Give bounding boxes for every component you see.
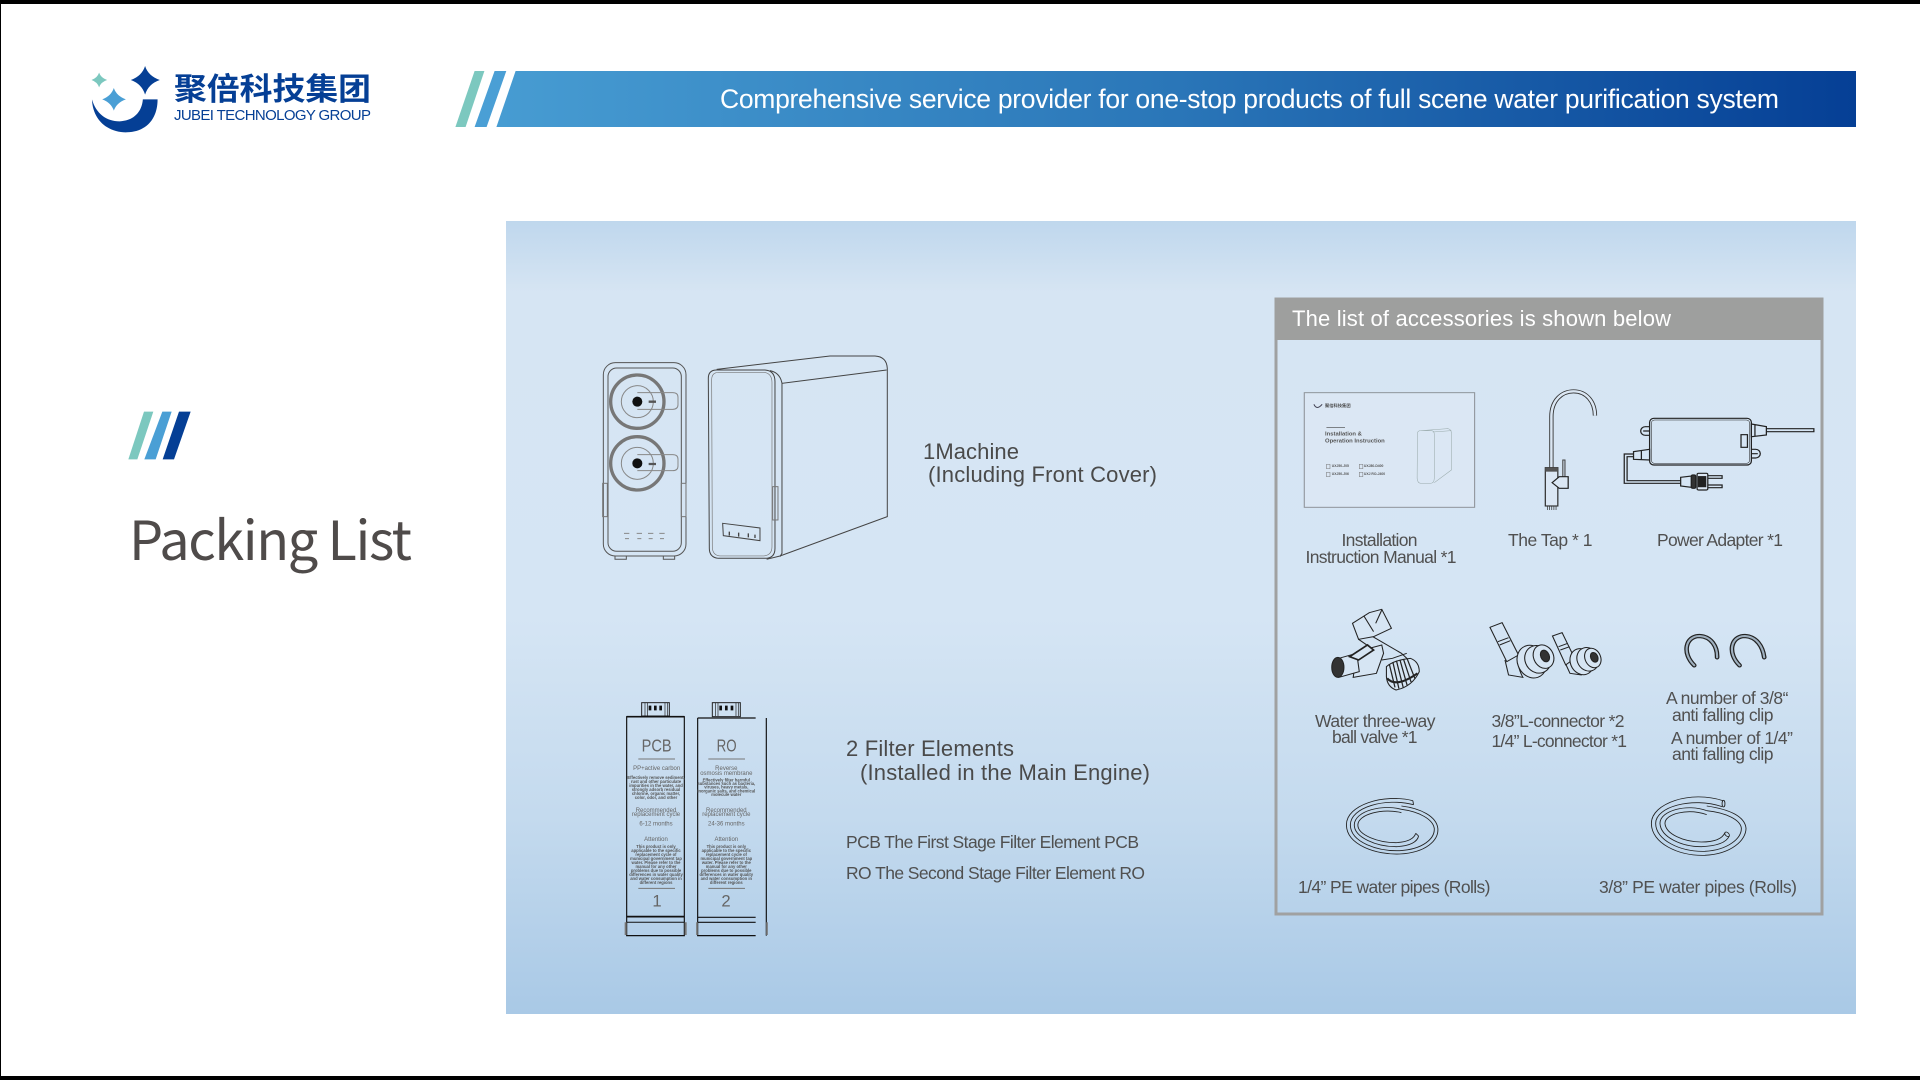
filter 2: RO: osmosis membrane xyxy=(700,771,753,777)
icon: stars and crescent xyxy=(92,66,160,132)
filter 1: PCB: PP+active carbon xyxy=(633,766,680,772)
filter 1: PCB: manual for any other xyxy=(635,864,677,869)
adapter label: Power Adapter *1 xyxy=(1657,530,1783,550)
filter 2: RO: replacement cycle of xyxy=(706,852,747,857)
filter 2: RO: water. Please refer to the xyxy=(701,860,751,865)
accessory: 1/4 inch PE pipe roll xyxy=(1298,798,1490,897)
clip label 1/4: A number of 1/4” xyxy=(1671,728,1793,748)
accessory: power adapter xyxy=(1624,418,1814,550)
filter 1: PCB: Recommended xyxy=(636,808,676,814)
filter 2: RO: Effectively filter harmful xyxy=(703,777,750,782)
heading stripes xyxy=(128,412,191,459)
heading text: Packing List xyxy=(129,497,412,576)
manual cover: 聚倍科技集团 xyxy=(1325,402,1351,408)
pipe roll label: 3/8” PE water pipes (Rolls) xyxy=(1599,877,1797,897)
accessory: 3/8 inch PE pipe roll xyxy=(1599,797,1797,897)
accessories frame xyxy=(1276,299,1822,914)
logo Chinese name: 聚倍科技集团 xyxy=(174,64,371,109)
filter 1: PCB: Attention xyxy=(644,837,668,843)
filter 2: RO: different regions xyxy=(710,880,743,885)
filter captions: 2 Filter Elements xyxy=(846,736,1014,761)
clip label 3/8 second line: anti falling clip xyxy=(1672,705,1774,725)
filter 1: PCB: 6-12 months xyxy=(639,822,673,828)
pipe roll label: 1/4” PE water pipes (Rolls) xyxy=(1298,877,1490,897)
filter 1: PCB: different regions xyxy=(640,880,673,885)
manual label: Installation xyxy=(1342,530,1418,550)
filter captions: RO The Second Stage Filter Element RO xyxy=(846,863,1145,883)
filter 2: RO: substances such as bacteria, xyxy=(697,781,755,786)
filter 2: RO: inorganic salts, and chemical xyxy=(697,788,755,793)
filter 1: PCB: impurities in the water, and xyxy=(629,783,683,788)
manual cover xyxy=(1304,393,1475,507)
filter 1: PCB xyxy=(626,703,686,936)
tap icon xyxy=(1545,391,1595,510)
manual cover: Operation Instruction xyxy=(1325,439,1385,445)
filter 2: RO: Attention xyxy=(715,837,738,843)
manual cover: Installation & xyxy=(1325,432,1362,438)
clip label 3/8: A number of 3/8“ xyxy=(1666,688,1789,708)
filter captions: (Installed in the Main Engine) xyxy=(860,760,1150,785)
connector icon xyxy=(1490,623,1604,682)
filter 1: PCB: replacement cycle xyxy=(632,812,681,818)
pipe roll icon xyxy=(1651,797,1746,855)
filter 1: PCB: applicable to the specific xyxy=(631,848,681,853)
filter 2: RO: Reverse xyxy=(715,766,738,772)
panel: packing contents xyxy=(506,221,1856,1014)
filter 1: PCB: color, odor, and other xyxy=(635,795,678,800)
filter 2: RO: RO xyxy=(717,736,737,756)
accessory: instruction manual xyxy=(1304,393,1475,567)
filter 2: RO: applicable to the specific xyxy=(702,848,752,853)
filter 1: PCB: strongly adsorb residual xyxy=(632,787,680,792)
manual cover: UXJ50-J06 xyxy=(1332,472,1349,476)
header banner xyxy=(455,71,1856,127)
filter 2: RO: 24-36 months xyxy=(708,822,745,828)
tap label: The Tap * 1 xyxy=(1508,530,1592,550)
valve icon xyxy=(1332,609,1419,690)
filter 2: RO: municipal government tap xyxy=(700,856,753,861)
filter 1: PCB: rust and other particulate xyxy=(631,779,682,784)
adapter icon xyxy=(1624,418,1814,490)
pipe roll icon xyxy=(1346,798,1438,854)
filter 2: RO: manual for any other xyxy=(706,864,747,869)
machine caption: (Including Front Cover) xyxy=(928,462,1157,487)
manual cover: UXJ50-J05 xyxy=(1332,464,1349,468)
filter 2: RO: and water consumption in xyxy=(701,876,753,881)
banner bar xyxy=(496,71,1856,127)
panel: accessories list xyxy=(1274,298,1824,914)
manual cover: UXJ80-D400 xyxy=(1364,464,1384,468)
section heading: Packing List xyxy=(128,412,412,576)
manual label second line: Instruction Manual *1 xyxy=(1306,547,1456,567)
filter 2: RO xyxy=(697,703,767,936)
filter 2: RO: viruses, heavy metals, xyxy=(704,785,748,790)
illustration: machine front and side views xyxy=(603,356,887,559)
filter 2: RO: differences in water quality xyxy=(700,872,754,877)
filter 2: RO: This product is only xyxy=(707,844,747,849)
accessory: L-connectors xyxy=(1490,623,1627,751)
connector label second line: 1/4” L-connector *1 xyxy=(1492,731,1627,751)
filter 1: PCB: 1 xyxy=(652,892,662,911)
filter 2: RO: Recommended xyxy=(706,808,747,814)
logo English name: JUBEI TECHNOLOGY GROUP xyxy=(174,107,371,124)
filter 1: PCB: differences in water quality xyxy=(629,872,683,877)
illustration: two filter elements xyxy=(626,703,767,936)
filter 1: PCB: Effectively remove sediment, xyxy=(627,775,685,780)
accessories header text: The list of accessories is shown below xyxy=(1292,306,1671,331)
filter 1: PCB: problems due to possible xyxy=(631,868,682,873)
filter 2: RO: molecule water xyxy=(711,792,742,797)
machine caption xyxy=(923,439,1157,487)
manual cover: UXJ RO-J400 xyxy=(1364,472,1385,476)
banner stripes xyxy=(455,71,506,127)
filter 2: RO: replacement cycle xyxy=(702,812,751,818)
filter 1: PCB: replacement cycle of xyxy=(635,852,677,857)
accessory: three-way ball valve xyxy=(1315,609,1436,747)
filter captions: PCB The First Stage Filter Element PCB xyxy=(846,832,1139,852)
machine caption: 1Machine xyxy=(923,439,1019,464)
filter 1: PCB: chlorine, organic matter, xyxy=(632,791,680,796)
filter 1: PCB: PCB xyxy=(642,736,672,756)
valve label second line: ball valve *1 xyxy=(1332,727,1418,747)
filter 1: PCB: This product is only xyxy=(636,844,676,849)
filter 2: RO: 2 xyxy=(721,892,731,911)
machine side view xyxy=(708,356,887,559)
filter 2: RO: problems due to possible xyxy=(701,868,752,873)
valve label: Water three-way xyxy=(1315,711,1436,731)
accessories header xyxy=(1274,298,1824,340)
clips icon xyxy=(1687,636,1764,665)
machine front view xyxy=(603,363,686,559)
accessory: anti falling clips xyxy=(1666,636,1793,764)
connector label: 3/8”L-connector *2 xyxy=(1492,711,1624,731)
filter 1: PCB: and water consumption in xyxy=(630,876,682,881)
filter 1: PCB: municipal government tap xyxy=(630,856,682,861)
filter captions xyxy=(846,736,1150,883)
filter 1: PCB: water. Please refer to the xyxy=(631,860,681,865)
clip label 1/4 second line: anti falling clip xyxy=(1672,744,1774,764)
banner text: Comprehensive service provider for one-stop products of full scene water purification system xyxy=(720,84,1779,114)
accessory: the tap xyxy=(1508,391,1595,550)
logo: Jubei Technology Group xyxy=(92,64,371,132)
